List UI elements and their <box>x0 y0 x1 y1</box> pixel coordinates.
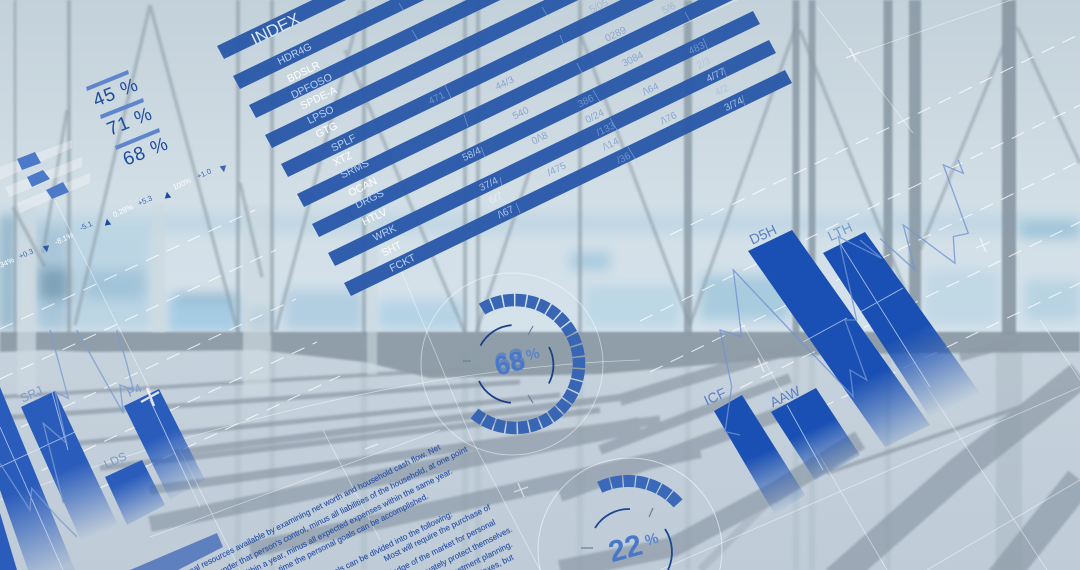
bar: LDS: LDS <box>102 449 129 472</box>
ticker row: -5.1 <box>78 219 94 232</box>
row labels: HTLV <box>360 206 389 228</box>
ticker row: -8.1% <box>53 230 75 247</box>
ticker row: ▼ <box>217 162 230 176</box>
gauge value: 68 <box>491 342 528 379</box>
gauge percent sign: % <box>524 345 541 365</box>
ticker row: +1.0 <box>195 167 213 181</box>
table values: /133 <box>595 120 617 139</box>
row labels: FCKT <box>388 252 418 275</box>
ticker row: +0.3 <box>17 247 35 261</box>
table values: 483 <box>687 40 707 57</box>
row labels: LPSO <box>305 104 336 127</box>
table values: 0/24 <box>584 107 606 126</box>
table values: 4/2 <box>713 83 731 99</box>
gauge inner arcs <box>595 509 672 570</box>
table values: 5/6 <box>660 1 678 17</box>
bar: AAW: AAW <box>767 382 803 410</box>
ticker row: ▲ <box>101 215 114 229</box>
gauge segments <box>474 300 579 428</box>
mini bar legend icon <box>0 140 90 213</box>
row labels: BDSLR <box>285 59 322 85</box>
table values: /\64 <box>641 81 661 98</box>
line chart: left <box>0 330 133 537</box>
ticker row: ▲ <box>161 188 174 202</box>
bar: P4: P4 <box>125 381 144 400</box>
gauge segments <box>600 481 679 504</box>
row labels: DRGS <box>353 187 386 211</box>
ticker row: +5.3 <box>136 194 154 208</box>
gauge ticks <box>581 508 653 548</box>
ticker row: 0.28% <box>111 202 135 219</box>
gauge percent sign: % <box>643 530 660 550</box>
bar: LDS <box>102 449 165 525</box>
table values: 3/74 <box>723 95 745 114</box>
table values: 0/\8 <box>530 130 550 147</box>
ticker row <box>0 162 230 272</box>
column tick marks <box>399 3 745 213</box>
table values: 540 <box>511 105 531 122</box>
stat: 68 %: 68 % <box>120 133 172 170</box>
table values: 6/7 <box>487 191 505 207</box>
table values: /\67 <box>496 204 516 221</box>
row labels: OCAN <box>346 175 379 199</box>
table values: 44/3 <box>494 74 516 93</box>
row labels: DPFOSO <box>289 71 334 101</box>
row labels: HDR4G <box>276 41 314 68</box>
stat: 45 %: 45 % <box>90 74 142 111</box>
row labels <box>276 41 418 275</box>
gauge ticks <box>463 326 533 403</box>
table stripes <box>217 0 792 296</box>
table values: /475 <box>546 160 568 179</box>
gauge inner arcs <box>479 325 553 403</box>
text block heading strip <box>130 533 223 570</box>
white dashed grid lines <box>0 34 1080 490</box>
bar: ICF <box>701 384 805 515</box>
bar: LTH: LTH <box>825 219 855 244</box>
table values: 0289 <box>603 25 629 45</box>
white lines over bars <box>0 240 930 570</box>
stat: 71 %: 71 % <box>104 103 156 140</box>
ticker row: 100% <box>171 176 193 192</box>
gauge value: 22 <box>605 529 646 569</box>
gauge: 68 % <box>421 273 603 455</box>
line chart: right <box>720 160 968 435</box>
table values: 4/77 <box>705 66 727 85</box>
table values: 58/4 <box>461 145 483 164</box>
bar chart: right <box>701 219 985 515</box>
paragraph text block: Most will require the purchase of <box>382 502 493 563</box>
table values <box>427 0 745 221</box>
bar: ICF: ICF <box>701 384 728 408</box>
table values: 386 <box>576 93 596 110</box>
row labels: XTZ <box>331 149 355 169</box>
row labels: SPLF <box>329 132 358 154</box>
table values: /36 <box>615 151 633 167</box>
bar: AAW <box>767 382 860 480</box>
stat list: percentages <box>86 70 172 170</box>
table values: /\76 <box>659 110 679 127</box>
bar: unlabelled left <box>0 387 75 570</box>
bar: D5H <box>747 221 930 447</box>
bar chart: left <box>0 381 205 570</box>
bar: LTH <box>823 219 985 425</box>
row labels: SPDE-A <box>298 84 339 112</box>
table values: 3084 <box>620 50 646 70</box>
cross markers <box>141 48 990 497</box>
table values: 471 <box>427 90 447 107</box>
ticker row: ▼ <box>40 242 53 256</box>
bar: D5H: D5H <box>747 221 779 248</box>
row labels: SHT <box>380 239 404 259</box>
table values: 37/4 <box>478 175 500 194</box>
table heading: INDEX <box>248 9 303 49</box>
index table <box>217 0 792 296</box>
row labels: WRK <box>371 223 398 244</box>
table values: /\14 <box>601 136 621 153</box>
bar: P4 <box>124 381 205 500</box>
gauge outer ring <box>538 458 722 570</box>
gauge value: 68 <box>491 345 528 382</box>
gauge outer ring <box>421 273 603 455</box>
row labels: GTG <box>314 120 340 141</box>
bar: SRJ <box>18 383 118 545</box>
row labels: SRMS <box>338 157 371 181</box>
table values: 2/3 <box>695 56 713 72</box>
bar: SRJ: SRJ <box>18 383 45 406</box>
gauge: 22 % <box>538 458 722 570</box>
